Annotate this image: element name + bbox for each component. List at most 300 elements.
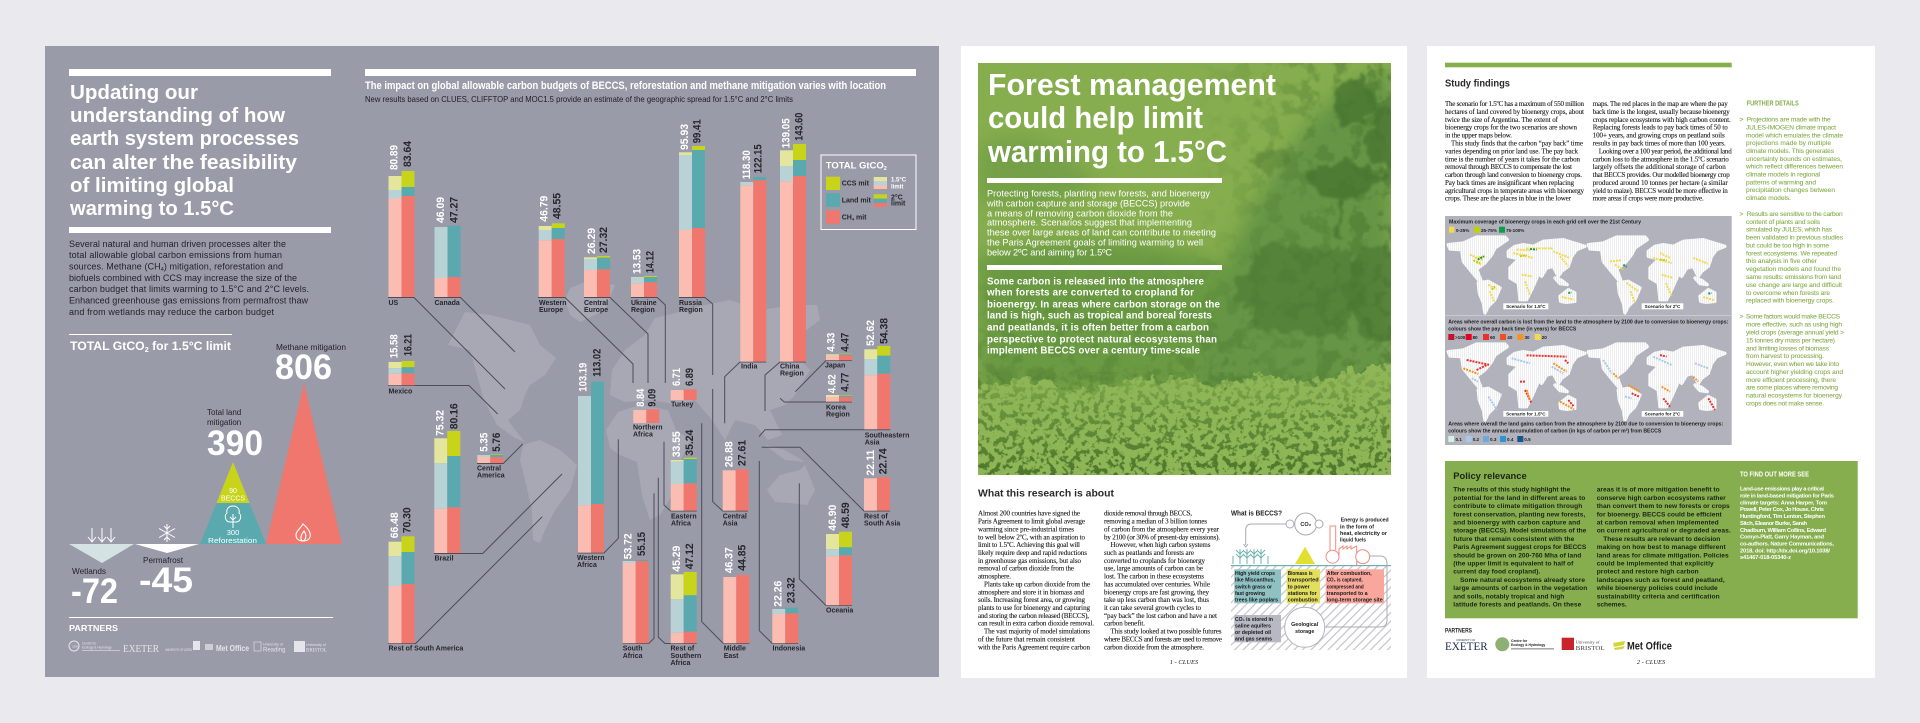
text block: research column 1: The vast majority of model simulations xyxy=(984,628,1090,636)
text block: findings column 2: Looking over a 100 year period, the additional land xyxy=(1599,147,1732,155)
legend: coverage of bioenergy crops: 75-100% xyxy=(1506,228,1524,233)
bar group: Rest of South America: 66.48 xyxy=(389,512,401,538)
bar group: Rest of South Asia xyxy=(864,447,900,528)
box: policy relevance xyxy=(1445,461,1858,618)
icon: biomass pile xyxy=(1295,547,1315,564)
bullet 2: Results are sensitive to the carbon xyxy=(1747,211,1843,218)
heading: left column title: understanding of how xyxy=(70,105,285,127)
logo: University of Reading: Reading xyxy=(263,648,285,654)
bar group: Northern Africa xyxy=(633,388,663,439)
bar group: Mexico xyxy=(388,334,414,395)
policy column 1: Paris Agreement suggest crops for BECCS xyxy=(1453,544,1587,551)
chart: permafrost triangle xyxy=(135,524,199,600)
bar group: Oceania: 46.90 xyxy=(827,505,839,531)
bullet 3: crops does not make sense. xyxy=(1746,401,1824,408)
panel: bioenergy maps xyxy=(1445,216,1732,445)
text block: introduction: these over large areas of land can contribute to meeting xyxy=(987,228,1216,238)
text block: research column 1: soils. Increasing forest area, or growing xyxy=(978,596,1086,604)
text block: research column 2: where BECCS and forests are used to remove xyxy=(1104,635,1222,643)
box: energy crops text: switch grass or xyxy=(1235,584,1272,590)
bullet 3: 15 tonnes dry mass per hectare) xyxy=(1746,337,1835,344)
logo: Centre for Ecology and Hydrology: CEH xyxy=(72,644,78,648)
text block: key message: land is high, such as tropical and boreal forests xyxy=(987,311,1213,322)
bar group: Central Asia: 26.88 xyxy=(723,441,735,467)
bar group: Rest of South Asia: South Asia xyxy=(864,521,900,528)
legend: carbon loss pay back: >100 xyxy=(1455,335,1466,340)
CO2 cycle icon: CO₂ xyxy=(1300,522,1312,528)
bar group: Southeastern Asia: Southeastern xyxy=(865,433,909,440)
chart heading: total GtCO2: TOTAL GtCO xyxy=(70,339,143,353)
legend: Total GtCO2: limit xyxy=(891,200,906,207)
bar group: Eastern Africa: 35.24 xyxy=(684,429,696,456)
bar group: Central America: 5.35 xyxy=(478,433,490,452)
text block: findings column 1: agricultural crops in temperate areas with bioenergy xyxy=(1445,187,1584,195)
chart: methane mitigation triangle xyxy=(266,343,346,544)
text block: research column 1: Almost 200 countries have signed the xyxy=(978,510,1080,518)
legend: carbon gain accumulation: 0.5 xyxy=(1524,437,1531,442)
text block: research column 2: by 2100 (or 30% of present-day emissions). xyxy=(1104,533,1220,541)
find out more: Chadburn, William Collins, Edward xyxy=(1740,528,1826,534)
legend: coverage of bioenergy crops xyxy=(1449,219,1642,233)
text block: research column 2: such as peatlands and forests are xyxy=(1104,549,1194,557)
text block: introduction: atmosphere. Scenarios suggest that implementing xyxy=(987,218,1192,228)
bar group: Canada: 46.09 xyxy=(435,197,447,223)
logo: University of Bristol: University of xyxy=(1576,640,1600,644)
text block: introduction xyxy=(986,178,1222,270)
text: energy output: liquid fuels xyxy=(1340,538,1366,544)
box: stored CO2 text: and gas seams xyxy=(1235,636,1272,642)
policy column 1: current day food cropland). xyxy=(1453,569,1540,576)
text block: introduction: with carbon capture and storage (BECCS) provide xyxy=(986,199,1190,209)
heading: left column title: Updating our xyxy=(70,82,198,104)
bar group: Central Asia: Central xyxy=(723,513,747,520)
bar group: Japan xyxy=(825,333,852,370)
bar group: Central Europe: Central xyxy=(584,300,608,307)
text block: introduction: the Paris Agreement goals of limiting warming to well xyxy=(987,238,1203,248)
bar group: Russia Region: 99.41 xyxy=(692,119,704,143)
bar group: Central Asia: Asia xyxy=(723,521,738,528)
bar group: India: 122.15 xyxy=(753,144,765,173)
text block: research column 1: removal of carbon dioxide from the xyxy=(978,565,1074,573)
legend: carbon gain accumulation xyxy=(1448,422,1723,442)
chart: methane mitigation triangle: Methane mitigation xyxy=(276,343,346,352)
circle: geological storage: Geological xyxy=(1291,622,1319,628)
text block: research column 2: dioxide removal through BECCS, xyxy=(1104,510,1192,518)
logo: University of Leeds xyxy=(165,641,200,652)
footer: page number 2: 2 - CLUES xyxy=(1637,659,1666,666)
bar group: Canada xyxy=(434,197,460,307)
title xyxy=(987,67,1276,169)
text block: introduction: below 2ºC and aiming for 1.5ºC xyxy=(987,248,1112,258)
text: energy output: heat, electricity or xyxy=(1340,531,1387,537)
text block: findings column 2: crops replace ecosystems with high carbon content. xyxy=(1593,116,1731,124)
chart: wetlands triangle xyxy=(69,528,134,611)
policy column 1: contribute to climate mitigation through xyxy=(1453,503,1582,510)
panel: global carbon budgets (grey poster) xyxy=(45,46,939,677)
label: scenario 1.5C bottom: Scenario for 1.5ºC xyxy=(1506,412,1546,416)
diagram: what is BECCS xyxy=(1231,509,1391,650)
bar group: Northern Africa: Africa xyxy=(633,432,653,439)
bar group: South Africa: 55.15 xyxy=(636,532,648,556)
heading: chart title: New results based on CLUES, CLIFFTOP and MOC1.5 provide an estimate of the geographic spread for 1.5°C and 2°C limits xyxy=(365,94,793,104)
box: combustion text: long-term storage site xyxy=(1327,598,1383,604)
text block: research column 1: plants to use for bioenergy and capturing xyxy=(978,604,1090,612)
bullet 1: uncertainty bounds on estimates, xyxy=(1746,156,1842,163)
text block: research column 2: take up less carbon than was lost, thus xyxy=(1104,596,1209,604)
heading: left column title xyxy=(69,69,331,233)
find out more: Land-use emissions play a critical xyxy=(1740,487,1824,493)
bullet 1 xyxy=(1740,117,1843,202)
text block: intro paragraph: 4 xyxy=(161,267,164,273)
logo: University of Reading xyxy=(254,642,285,654)
box: biomass text: stations for xyxy=(1288,591,1317,597)
bar group: China Region: 143.60 xyxy=(793,113,805,141)
chart: wetlands triangle: Wetlands xyxy=(72,567,106,576)
circle: geological storage: storage xyxy=(1295,629,1314,635)
sidebar: further details: FURTHER DETAILS xyxy=(1747,101,1799,108)
text block: findings column 2: results in pay back times of more than 100 years. xyxy=(1593,140,1726,148)
text block: key message xyxy=(986,276,1221,356)
legend: carbon loss pay back: Areas where overall carbon is lost from the land to the atmosphere by 2100 due to conversion to bioenergy crops: xyxy=(1448,319,1728,325)
text block: findings column 2: Replacing forests leads to pay back times of 50 to xyxy=(1593,124,1728,132)
bar group: Oceania xyxy=(826,502,853,614)
text block: research column 2: This study looked at two possible futures xyxy=(1110,628,1222,636)
bar group: Korea Region: Region xyxy=(826,412,850,418)
text block: findings column 2 xyxy=(1593,100,1732,203)
bar group: Ukraine Region xyxy=(631,249,657,314)
legend: Total GtCO2: 4 xyxy=(852,217,855,222)
text block: introduction: a means of removing carbon dioxide from the xyxy=(987,209,1173,219)
bullet 3: account higher yielding crops and xyxy=(1746,369,1843,376)
title: Forest management xyxy=(988,67,1276,102)
bullet 1: Projections are made with the xyxy=(1747,117,1831,124)
heading: chart title: The impact on global allowable carbon budgets of BECCS, reforestation and methane mitigation varies with location xyxy=(365,80,886,92)
bar group: Central America: America xyxy=(477,473,505,480)
bullet 2: been validated in previous studies xyxy=(1746,235,1844,242)
box: stored CO2 text xyxy=(1234,615,1281,642)
bar group: Western Europe xyxy=(539,193,566,314)
bar group: US xyxy=(388,140,414,307)
legend: Total GtCO2: Land mit xyxy=(842,198,872,205)
bar group: Central Asia: 27.61 xyxy=(737,440,749,466)
text block: findings column 1: Pay back times are insignificant when replacing xyxy=(1445,179,1574,187)
policy column 2: for bioenergy. BECCS could be efficient xyxy=(1597,511,1722,518)
text block: findings column 1: varies depending on prior land use. The pay back xyxy=(1445,147,1578,155)
text block: key message: Some carbon is released into the atmosphere xyxy=(987,276,1205,287)
text block: research column 2: has accumulated over centuries. While xyxy=(1104,580,1210,588)
bullet 2: to overcome when forests are xyxy=(1746,290,1830,297)
hero image: misty forest in green duotone xyxy=(978,63,1391,475)
pipe to geological storage xyxy=(1326,556,1387,627)
bullet 3: yield crops (average annual yield > xyxy=(1746,330,1844,336)
bar group: Japan: 4.33 xyxy=(826,333,838,352)
logo: Centre for Ecology and Hydrology xyxy=(69,641,120,651)
bullet 1: precipitation changes between xyxy=(1746,187,1835,194)
policy column 1: The results of this study highlight the xyxy=(1453,487,1571,494)
chart: total land mitigation triangle: 90 xyxy=(229,488,237,495)
bar group: Korea Region: 4.62 xyxy=(826,374,838,393)
bar group: US: 83.64 xyxy=(402,140,414,167)
text block: research column 2 xyxy=(1104,510,1222,651)
text block: findings column 1: carbon through land conversion to bioenergy crops. xyxy=(1445,171,1582,179)
legend: Total GtCO2: 1.5°C xyxy=(891,177,907,183)
bar group: Rest of Southern Africa: Rest of xyxy=(670,646,695,653)
legend: coverage of bioenergy crops: Maximum coverage of bioenergy crops in each grid cell over the 21st Century xyxy=(1449,219,1642,225)
bar group: South Africa xyxy=(623,532,649,660)
bar group: Eastern Africa: Africa xyxy=(671,521,691,528)
box: stored CO2 text: saline aquifers xyxy=(1235,624,1271,630)
text block: research column 1: atmosphere. xyxy=(978,573,1011,581)
text block: findings column 2: back time is the longest, usually because bioenergy xyxy=(1593,108,1730,116)
logo: Met Office: Met Office xyxy=(216,644,249,653)
text block: research column 1 xyxy=(978,510,1094,651)
bar group: Central Europe: 27.32 xyxy=(598,227,610,253)
title: could help limit xyxy=(988,100,1203,135)
chart: total land mitigation triangle xyxy=(200,408,266,545)
policy column 2: than convert them to new forests or crops xyxy=(1597,503,1730,510)
bullet 1: JULES-IMOGEN climate impact xyxy=(1746,124,1836,132)
text block: key message: when forests are converted to cropland for xyxy=(986,287,1194,298)
text block: findings column 2: 100+ years, and growing crops on peatland soils xyxy=(1593,132,1725,140)
bar group: Central America: 5.76 xyxy=(491,433,503,452)
text block: findings column 1: bioenergy crops for the two scenarios are shown xyxy=(1445,124,1578,132)
bar group: Rest of South America: 70.30 xyxy=(402,507,414,533)
find out more xyxy=(1740,472,1834,561)
logo: Centre for Ecology and Hydrology: Centre for xyxy=(82,642,97,646)
logo: University of Exeter: EXETER xyxy=(123,644,159,655)
chart heading: total GtCO2: 2 xyxy=(145,347,149,354)
text block: research column 1: can result in extra carbon dioxide removal. xyxy=(978,620,1094,628)
text block: research column 2: of carbon from the atmosphere every year xyxy=(1104,525,1220,533)
hatched ground xyxy=(1231,566,1391,650)
find out more: co-authors. Nature Communications, xyxy=(1740,542,1834,548)
heading: left column title: of limiting global xyxy=(70,175,234,197)
policy column 2: landscapes such as forest and peatland, xyxy=(1597,577,1725,584)
legend: Total GtCO2 xyxy=(821,155,916,230)
text block: intro paragraph: Several natural and human driven processes alter the xyxy=(69,239,286,249)
bar group: Middle East xyxy=(723,545,749,660)
text block: research column 1: atmosphere and store it in biomass and xyxy=(978,588,1084,596)
text block: key message: implement BECCS over a century time-scale xyxy=(987,345,1201,356)
bar group: Rest of Southern Africa: Southern xyxy=(670,653,701,660)
text block: research column 2: carbon benefit. xyxy=(1104,620,1145,628)
bullet 1: which reflect differences between xyxy=(1745,164,1843,171)
box: combustion text: CO₂ is captured, xyxy=(1327,578,1363,584)
legend: Total GtCO2: 2°C xyxy=(891,194,903,202)
text block: research column 1: Paris Agreement to limit global average xyxy=(978,518,1085,526)
chart: methane mitigation triangle: 806 xyxy=(275,348,332,387)
find out more: TO FIND OUT MORE SEE xyxy=(1740,472,1809,479)
bullet 2: this analysis in five other xyxy=(1746,258,1818,265)
bullet 3: more efficient processing, there xyxy=(1746,377,1836,384)
text block: findings column 2: that BECCS provides. Our modelled bioenergy crop xyxy=(1593,171,1730,179)
bar group: Middle East: East xyxy=(724,653,739,660)
box: energy crops text xyxy=(1234,569,1281,604)
bar group: Indonesia: 23.32 xyxy=(786,577,798,603)
bar group: US: US xyxy=(388,300,399,307)
policy column 2: schemes. xyxy=(1597,602,1627,608)
bar group: China Region: 139.05 xyxy=(781,118,793,148)
legend: carbon gain accumulation: Areas where overall the land gains carbon from the atmosphere by 2100 due to conversion to bioenergy crops: xyxy=(1448,422,1723,428)
policy column 2: on current agricultural or degraded areas. xyxy=(1597,528,1731,535)
policy column 2: land areas for climate mitigation. Policies xyxy=(1597,552,1729,559)
chart: total land mitigation triangle: Reforestation xyxy=(208,536,257,545)
text block: key message: bioenergy. In areas where carbon storage on the xyxy=(987,300,1221,311)
chart: wetlands triangle: -72 xyxy=(71,572,118,611)
logo: University of Bristol xyxy=(1562,638,1605,652)
legend: Total GtCO2: mit xyxy=(854,215,867,222)
text block: research column 2: removing a median of 3 billion tonnes xyxy=(1104,518,1207,526)
text block: findings column 2: carbon loss to the atmosphere in the 1.5ºC scenario xyxy=(1593,155,1729,163)
policy column 2: These results are relevant to decision xyxy=(1603,536,1720,543)
legend: carbon gain accumulation: colours show the annual accumulation of carbon (in kgs of carbon per m²) from BECCS xyxy=(1448,428,1662,435)
logo: Met Office xyxy=(1613,640,1672,652)
bar group: Brazil xyxy=(434,403,460,563)
footer: page number 1: 1 - CLUES xyxy=(1170,659,1199,666)
chart: permafrost triangle: Permafrost xyxy=(143,556,184,565)
legend: Total GtCO2: 2 xyxy=(884,166,887,172)
bullet 3: natural ecosystems for bioenergy xyxy=(1746,393,1843,400)
bar group: Rest of Southern Africa xyxy=(670,543,701,667)
policy column 1: large amounts of carbon in the vegetation xyxy=(1453,585,1587,592)
bullet 3: However, even when we take into xyxy=(1746,361,1839,368)
icon: power station xyxy=(1326,526,1370,565)
partners row: PARTNERS xyxy=(69,623,118,633)
bar group: Eastern Africa: 33.55 xyxy=(671,431,683,457)
policy column 2: areas it is of more mitigation benefit to xyxy=(1597,487,1720,494)
text block: intro paragraph: ) mitigation, reforestation and xyxy=(164,262,283,272)
partners row xyxy=(69,617,333,655)
bullet 1: model which emulates the climate xyxy=(1746,132,1843,139)
bar group: Rest of South Asia: Rest of xyxy=(864,513,888,520)
icon: wetland reeds xyxy=(88,528,115,542)
policy column 1: (the upper limit is equivalent to half of xyxy=(1453,560,1574,568)
bar group: Western Africa: 113.02 xyxy=(592,349,604,377)
logo: Met Office: Met Office xyxy=(1627,640,1672,652)
bar group: Turkey: Turkey xyxy=(671,402,694,409)
text block: intro paragraph: total allowable global carbon emissions from human xyxy=(69,250,282,260)
policy column 2: while bioenergy policies could include xyxy=(1596,585,1718,592)
bar group: Northern Africa: 8.84 xyxy=(635,388,647,407)
icon: flame xyxy=(296,524,310,541)
find out more: climate targets: Anna Harper, Tom xyxy=(1740,500,1827,506)
heading: chart title xyxy=(365,69,916,104)
logo: University of Bristol: BRISTOL xyxy=(306,648,327,654)
bar group: Rest of Southern Africa: 47.12 xyxy=(684,543,696,569)
bullet 1: patterns of warming and xyxy=(1746,179,1816,186)
bar group: Central Europe: Europe xyxy=(584,307,608,314)
bar group: Ukraine Region: Ukraine xyxy=(631,300,657,307)
text block: findings column 1: time is the number of years it takes for the carbon xyxy=(1445,155,1580,163)
box: stored CO2 text: CO₂ is stored in xyxy=(1235,617,1273,623)
panel: page 1 forest management xyxy=(950,46,1420,678)
legend: carbon loss pay back: colours show the pay back time (in years) for BECCS xyxy=(1448,327,1577,333)
text block: research column 1: and storing the carbon released (BECCS), xyxy=(978,612,1089,620)
bar group: Russia Region: Region xyxy=(679,307,703,314)
text block: research column 2: it can take several growth cycles to xyxy=(1104,604,1202,612)
bar group: Canada: 47.27 xyxy=(448,197,460,223)
bar group: Western Europe: 48.55 xyxy=(552,193,564,219)
box: energy crops text: fast growing xyxy=(1235,591,1265,597)
legend: coverage of bioenergy crops: 25-75% xyxy=(1481,228,1497,233)
text: energy output: Energy is produced xyxy=(1341,518,1389,524)
legend: Total GtCO2: TOTAL GtCO xyxy=(826,160,884,171)
chart: total land mitigation triangle: 390 xyxy=(207,424,263,463)
logo: Met Office xyxy=(205,644,249,653)
policy column 1: Some natural ecosystems already store xyxy=(1460,577,1585,584)
legend: Total GtCO2: CH xyxy=(842,215,852,222)
bar group: Russia Region xyxy=(679,119,705,314)
text block: intro paragraph: Enhanced greenhouse gas emissions from permafrost thaw xyxy=(69,296,308,306)
find out more: Huntingford, Tim Lenton, Stephen xyxy=(1740,514,1825,520)
policy column 1: forest conservation, planting new forests, xyxy=(1453,511,1585,518)
heading: left column title: earth system processes xyxy=(70,128,299,150)
text block: findings column 1: removal through BECCS to compensate the lost xyxy=(1445,163,1572,171)
chart: total land mitigation triangle: 300 xyxy=(227,528,239,537)
bar group: Oceania: 48.59 xyxy=(840,502,852,528)
bullet 2: replaced with bioenergy crops. xyxy=(1746,298,1834,305)
bar group: Ukraine Region: 14.12 xyxy=(644,251,656,273)
text block: research column 2: bioenergy crops are fast growing, they xyxy=(1104,588,1210,596)
bullet 3: more effective, such as using high xyxy=(1746,322,1842,329)
legend: carbon loss pay back: 60 xyxy=(1490,335,1496,340)
bar group: China Region xyxy=(780,113,806,377)
bullet 1: > xyxy=(1740,117,1744,124)
bar group: Russia Region: Russia xyxy=(679,300,702,307)
bar group: Indonesia: Indonesia xyxy=(772,646,805,653)
text block: findings column 2: largely offsets the additional storage of carbon xyxy=(1593,163,1726,171)
icon: tree xyxy=(225,506,241,528)
logo: University of Bristol: University of xyxy=(306,643,326,647)
bar group: South Africa: South xyxy=(623,646,643,653)
chart: total land mitigation triangle: BECCS xyxy=(221,496,245,502)
text block: findings column 2: maps. The red places in the map are where the pay xyxy=(1593,100,1728,108)
text block: findings column 2: more areas if crops were more productive. xyxy=(1593,195,1704,203)
heading: left column title: can alter the feasibility xyxy=(70,152,298,174)
policy column 2: making on how best to manage different xyxy=(1597,544,1726,551)
bullet 3: and limiting losses of biomass xyxy=(1746,345,1830,352)
logo: University of Bristol xyxy=(294,641,327,654)
text block: research column 1: warming since pre-industrial times xyxy=(978,525,1074,533)
logo: Centre for Ecology and Hydrology: Ecology & Hydrology xyxy=(1511,643,1545,647)
legend: Total GtCO2: limit xyxy=(891,185,903,191)
text block: intro paragraph: sources. Methane (CH xyxy=(69,262,161,272)
bar group: Western Africa: Africa xyxy=(577,562,597,569)
text block: research column 1: of the future that remain consistent xyxy=(978,635,1075,643)
box: biomass text xyxy=(1287,569,1320,604)
bar group: Western Europe: 46.79 xyxy=(539,196,551,222)
bullet 2: forest ecosystems. We repeated xyxy=(1746,250,1837,257)
text: energy output xyxy=(1340,518,1389,544)
bar group: Turkey: 6.71 xyxy=(671,368,683,386)
box: combustion text: transported to a xyxy=(1327,591,1368,597)
bar group: Western Europe: Europe xyxy=(539,307,563,314)
find out more: 2018, doi: http://dx.doi.org/10.1038/ xyxy=(1740,548,1830,554)
box: energy crops text: trees like poplars xyxy=(1235,598,1278,604)
icon: snowflake xyxy=(159,524,175,542)
box: combustion text: compressed and xyxy=(1327,584,1364,590)
bar group: Brazil: 80.16 xyxy=(448,403,460,429)
box: combustion text xyxy=(1326,569,1384,604)
text block: research column 1: Plants take up carbon dioxide from the xyxy=(984,580,1090,588)
find out more: Powell, Peter Cox, Jo House, Chris xyxy=(1740,507,1824,513)
text block: research column 2: lost. The carbon in these ecosystems xyxy=(1104,573,1204,581)
bar group: Southeastern Asia: 54.38 xyxy=(878,318,890,344)
box: energy crops text: like Miscanthus, xyxy=(1235,578,1276,584)
text block: intro paragraph: biofuels combined with CCS may increase the size of the xyxy=(69,273,297,283)
bullet 1: climate models in regional xyxy=(1746,172,1821,178)
bar group: South Africa: 53.72 xyxy=(623,533,635,559)
